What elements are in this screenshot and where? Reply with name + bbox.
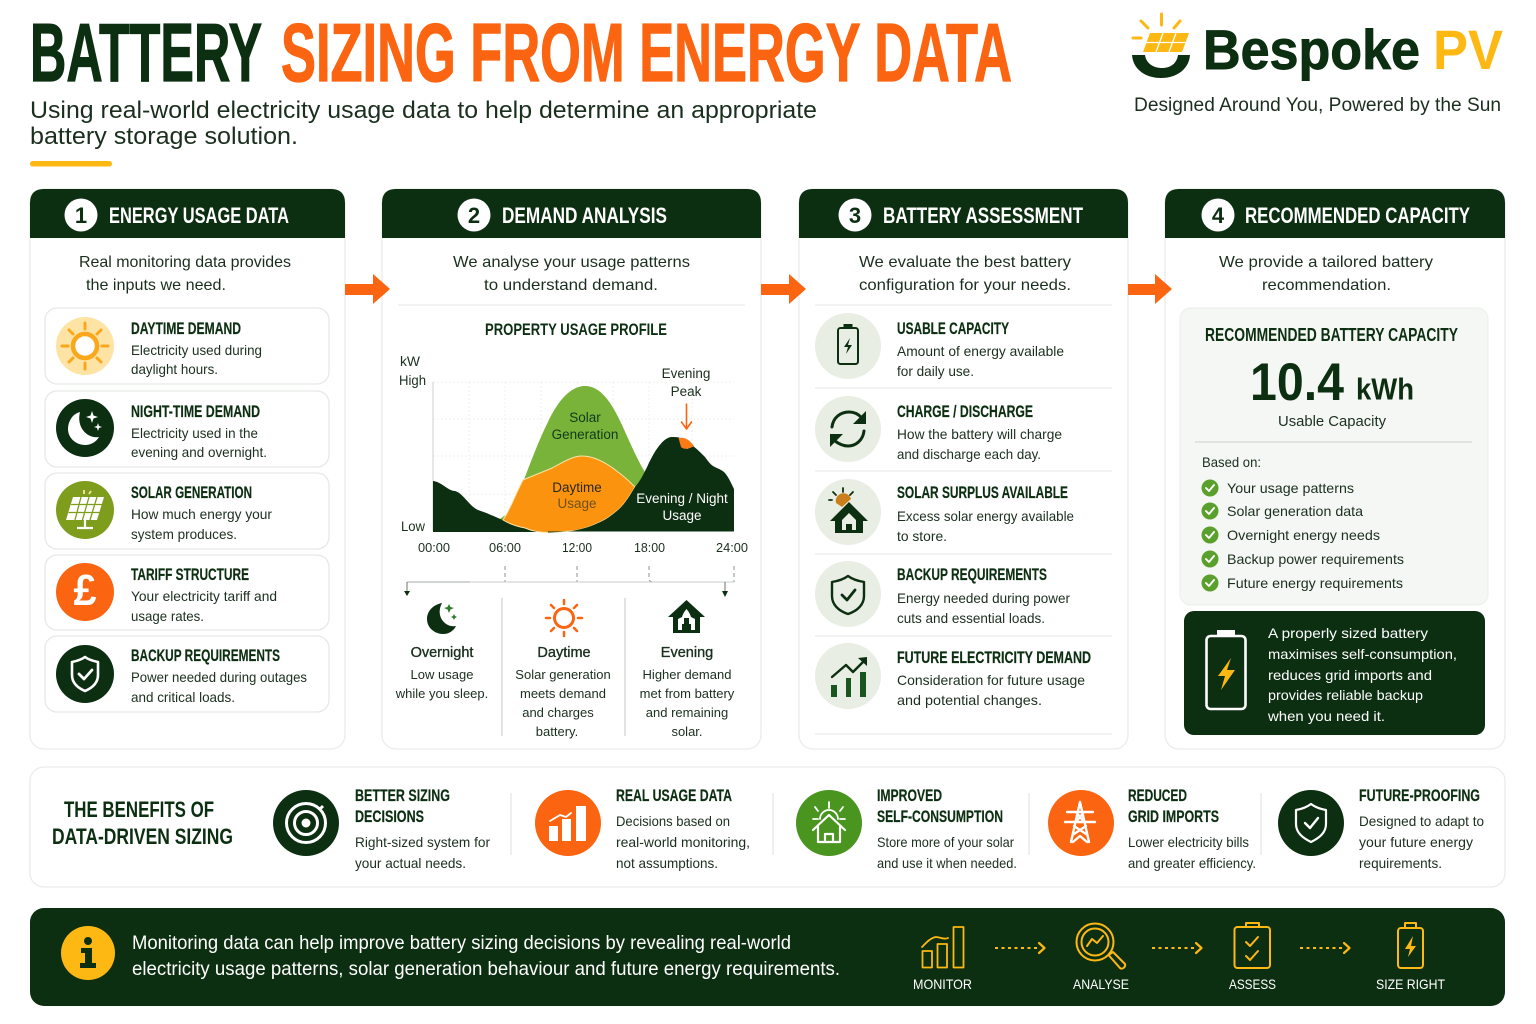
- benefit: reduced grid imports: and greater efficiency.: [1128, 855, 1256, 871]
- row: charge / discharge: How the battery will charge: [897, 426, 1062, 442]
- callout: properly sized battery: maximises self-consumption,: [1268, 646, 1457, 662]
- benefit: improved self-consumption: Store more of your solar: [877, 834, 1014, 850]
- column: daytime: battery.: [536, 724, 578, 739]
- row: charge / discharge: [815, 396, 1062, 462]
- row: future electricity demand: and potential changes.: [897, 692, 1042, 708]
- column: daytime: Solar generation: [515, 667, 611, 682]
- checklist: Future energy requirements: [1227, 575, 1403, 591]
- subtitle: Using real-world electricity usage data to help determine an appropriate: [30, 97, 817, 124]
- banner text: [132, 932, 840, 980]
- big number: 10.4 kWh: 10.4: [1250, 353, 1344, 412]
- chart text labels: Usage: [557, 496, 597, 511]
- chart text labels: 00:00: [418, 540, 450, 555]
- step: assess: ASSESS: [1229, 976, 1276, 992]
- chart text labels: Evening / Night: [636, 491, 728, 506]
- panel: benefits of data-driven sizing: [30, 767, 1505, 887]
- row: solar surplus available: [815, 479, 1074, 545]
- card: recommended battery capacity: RECOMMENDED BATTERY CAPACITY: [1205, 325, 1458, 345]
- panel 1 intro: the inputs we need.: [86, 277, 226, 294]
- benefits heading: [52, 797, 233, 849]
- column: daytime: and charges: [522, 705, 594, 720]
- chart text labels: 06:00: [489, 540, 521, 555]
- logo: Bespoke PV: PV: [1433, 18, 1503, 81]
- subtitle: [30, 97, 817, 150]
- icon: solar house: [796, 790, 862, 856]
- column: evening: Higher demand: [643, 667, 731, 682]
- panel 4 intro: We provide a tailored battery: [1219, 254, 1433, 271]
- banner: monitoring summary: [30, 908, 1505, 1006]
- logo: Bespoke PV: Designed Around You, Powered by the Sun: [1134, 95, 1501, 116]
- chart text labels: Generation: [552, 427, 618, 442]
- icon: target: [273, 790, 339, 856]
- step: monitor: [913, 927, 972, 992]
- benefit: improved self-consumption: IMPROVED: [877, 787, 942, 805]
- connector: time ranges: [404, 566, 734, 597]
- icon: moon: [427, 603, 456, 634]
- card: night-time demand: Electricity used in the: [131, 425, 258, 441]
- chart text labels: kW: [400, 354, 420, 369]
- chart text labels: Evening: [662, 366, 710, 381]
- row: solar surplus available: Excess solar energy available: [897, 508, 1074, 524]
- row: usable capacity: USABLE CAPACITY: [897, 320, 1009, 338]
- subtitle: battery storage solution.: [30, 123, 298, 150]
- icon: shield: [1278, 790, 1344, 856]
- icon: solar panel sun logo: [1132, 14, 1190, 78]
- row: backup requirements: Energy needed during power: [897, 590, 1070, 606]
- arrow: step 1 to 2: [345, 274, 390, 304]
- row: backup requirements: BACKUP REQUIREMENTS: [897, 566, 1047, 584]
- card: recommended battery capacity: [1180, 308, 1488, 605]
- chart text labels: [399, 354, 748, 555]
- column: daytime: [515, 600, 611, 739]
- row: usable capacity: [815, 313, 1064, 379]
- row: solar surplus available: SOLAR SURPLUS AVAILABLE: [897, 484, 1068, 502]
- step: assess: [1229, 923, 1276, 992]
- card: daytime demand: Electricity used during: [131, 342, 262, 358]
- column: daytime: Daytime: [537, 645, 591, 661]
- big number: 10.4 kWh: kWh: [1356, 372, 1414, 406]
- card: solar generation: [45, 473, 329, 549]
- step: analyse: ANALYSE: [1073, 976, 1129, 992]
- marker: evening peak: [678, 438, 694, 449]
- chart text labels: 18:00: [634, 540, 665, 555]
- panel 3 header: 3: [849, 203, 861, 228]
- row: charge / discharge: and discharge each day.: [897, 446, 1041, 462]
- callout: properly sized battery: reduces grid imports and: [1268, 667, 1432, 683]
- panel 3 header: [799, 189, 1128, 238]
- benefit: reduced grid imports: REDUCED: [1128, 787, 1187, 805]
- callout: properly sized battery: [1184, 611, 1485, 735]
- benefit: future-proofing: [1278, 787, 1484, 871]
- card: daytime demand: DAYTIME DEMAND: [131, 320, 241, 338]
- benefit: future-proofing: your future energy: [1359, 834, 1473, 850]
- arrow: analyse to assess: [1152, 943, 1202, 953]
- column: overnight: [395, 603, 488, 701]
- benefit: reduced grid imports: Lower electricity bills: [1128, 834, 1249, 850]
- panel 1 intro: Real monitoring data provides: [79, 254, 291, 271]
- panel 3 intro: configuration for your needs.: [859, 277, 1071, 294]
- card: backup requirements: BACKUP REQUIREMENTS: [131, 647, 280, 665]
- chart text labels: Peak: [671, 384, 702, 399]
- benefit: better sizing decisions: [273, 787, 490, 871]
- icon: battery with bolt: [1206, 630, 1246, 709]
- chart heading: PROPERTY USAGE PROFILE: [485, 320, 667, 339]
- panel 4 header: 4: [1212, 203, 1225, 228]
- column: evening: Evening: [661, 645, 713, 661]
- row: backup requirements: cuts and essential loads.: [897, 610, 1045, 626]
- column: daytime: meets demand: [520, 686, 606, 701]
- panel 2 header: DEMAND ANALYSIS: [502, 203, 667, 228]
- card: tariff structure: TARIFF STRUCTURE: [131, 566, 249, 584]
- benefit: improved self-consumption: [796, 787, 1017, 871]
- icon: pound: £: [74, 566, 97, 615]
- panel 2 header: 2: [468, 203, 480, 228]
- benefits heading: DATA-DRIVEN SIZING: [52, 824, 233, 849]
- panel 1 header: 1: [75, 203, 87, 228]
- card: solar generation: How much energy your: [131, 506, 272, 522]
- checklist: Your usage patterns: [1227, 480, 1354, 496]
- card: tariff structure: Your electricity tariff and: [131, 588, 277, 604]
- row: future electricity demand: Consideration for future usage: [897, 672, 1085, 688]
- checklist: Backup power requirements: [1227, 551, 1404, 567]
- card: daytime demand: [45, 308, 329, 384]
- logo: Bespoke PV: Bespoke: [1203, 18, 1420, 81]
- panel 3: battery assessment: [799, 189, 1128, 749]
- icon: shield: [815, 561, 881, 627]
- title: [30, 6, 1012, 99]
- card: night-time demand: [45, 391, 329, 467]
- chart text labels: Solar: [569, 410, 601, 425]
- row: solar surplus available: to store.: [897, 528, 947, 544]
- card: tariff structure: usage rates.: [131, 608, 204, 624]
- card: daytime demand: daylight hours.: [131, 361, 218, 377]
- icon: battery: [815, 313, 881, 379]
- benefit: real usage data: Decisions based on: [616, 813, 730, 829]
- card: backup requirements: [45, 636, 329, 712]
- panel 3 header: BATTERY ASSESSMENT: [883, 203, 1083, 228]
- icon: sync arrows: [815, 396, 881, 462]
- panel 2: demand analysis: [382, 189, 761, 749]
- icon: sun: [546, 600, 582, 636]
- row: usable capacity: Amount of energy available: [897, 343, 1064, 359]
- panel 2 intro: [453, 254, 690, 294]
- benefit: reduced grid imports: GRID IMPORTS: [1128, 808, 1219, 826]
- card: night-time demand: NIGHT-TIME DEMAND: [131, 403, 260, 421]
- panel 4 intro: recommendation.: [1262, 277, 1391, 294]
- panel 2 intro: to understand demand.: [484, 277, 658, 294]
- column: overnight: Overnight: [411, 645, 473, 661]
- column: evening: and remaining: [646, 705, 728, 720]
- icon: info: [61, 926, 115, 980]
- row: future electricity demand: [815, 643, 1091, 709]
- icon: growth chart: [815, 643, 881, 709]
- chart text labels: 12:00: [562, 540, 592, 555]
- callout: properly sized battery: A properly sized battery: [1268, 625, 1428, 641]
- banner text: Monitoring data can help improve battery sizing decisions by revealing real-world: [132, 932, 791, 954]
- panel 4 header: [1165, 189, 1505, 238]
- icon: house with sun: [815, 479, 881, 545]
- panel 3 intro: We evaluate the best battery: [859, 254, 1071, 271]
- card: backup requirements: Power needed during outages: [131, 669, 307, 685]
- icon: shield: [56, 645, 114, 703]
- row: backup requirements: [815, 561, 1070, 627]
- benefits heading: THE BENEFITS OF: [64, 797, 214, 822]
- banner text: electricity usage patterns, solar generation behaviour and future energy requirements.: [132, 958, 840, 980]
- row: future electricity demand: FUTURE ELECTRICITY DEMAND: [897, 649, 1091, 667]
- panel 1 header: ENERGY USAGE DATA: [109, 203, 289, 228]
- arrow: step 3 to 4: [1128, 274, 1172, 304]
- area: night usage left: [433, 481, 548, 532]
- column: evening: [640, 600, 735, 739]
- card: night-time demand: evening and overnight.: [131, 444, 267, 460]
- benefit: better sizing decisions: Right-sized system for: [355, 834, 490, 850]
- arrow: step 2 to 3: [761, 274, 806, 304]
- benefit: real usage data: real-world monitoring,: [616, 834, 750, 850]
- benefit: real usage data: REAL USAGE DATA: [616, 787, 732, 805]
- panel 3 intro: [859, 254, 1071, 294]
- area: evening usage: [548, 437, 734, 532]
- benefit: future-proofing: Designed to adapt to: [1359, 813, 1484, 829]
- benefit: reduced grid imports: [1048, 787, 1256, 871]
- icon: pound: [56, 563, 114, 621]
- panel 4 intro: [1219, 254, 1433, 294]
- area: solar generation: [488, 386, 645, 531]
- arrow: evening peak: [682, 404, 692, 429]
- panel 2 header: [382, 189, 761, 238]
- step: monitor: MONITOR: [913, 976, 972, 992]
- panel 2 intro: We analyse your usage patterns: [453, 254, 690, 271]
- area: daytime usage: [503, 456, 635, 532]
- card: tariff structure: [45, 555, 329, 630]
- icon: sun: [56, 317, 114, 375]
- panel 4: recommended capacity: [1165, 189, 1505, 749]
- card: backup requirements: and critical loads.: [131, 689, 235, 705]
- card: solar generation: SOLAR GENERATION: [131, 484, 252, 502]
- icon: solar panel: [56, 481, 114, 539]
- callout: properly sized battery: when you need it.: [1267, 708, 1385, 724]
- benefit: future-proofing: requirements.: [1359, 855, 1442, 871]
- step: size right: SIZE RIGHT: [1376, 976, 1445, 992]
- checklist: Solar generation data: [1227, 503, 1363, 519]
- icon: moon: [56, 399, 114, 457]
- column: overnight: Low usage: [411, 667, 473, 682]
- title: SIZING FROM ENERGY DATA: [281, 6, 1012, 99]
- checklist: [1202, 480, 1404, 592]
- chart text labels: Usage: [662, 508, 702, 523]
- checklist: Overnight energy needs: [1227, 527, 1380, 543]
- benefit: better sizing decisions: BETTER SIZING: [355, 787, 450, 805]
- benefit: improved self-consumption: SELF-CONSUMPTION: [877, 808, 1003, 826]
- panel 1 intro: [79, 254, 291, 294]
- callout: properly sized battery: provides reliable backup: [1268, 687, 1423, 703]
- chart: property usage profile: [399, 354, 748, 555]
- title: BATTERY: [30, 6, 262, 99]
- benefit: better sizing decisions: your actual needs.: [355, 855, 466, 871]
- column: evening: solar.: [671, 724, 703, 739]
- card: recommended battery capacity: Usable Capacity: [1278, 413, 1386, 430]
- benefit: improved self-consumption: and use it when needed.: [877, 855, 1017, 871]
- card: recommended battery capacity: Based on:: [1202, 454, 1261, 470]
- column: overnight: while you sleep.: [395, 686, 488, 701]
- logo: Bespoke PV: [1132, 14, 1503, 116]
- benefit: better sizing decisions: DECISIONS: [355, 808, 424, 826]
- icon: house: [668, 600, 705, 633]
- row: charge / discharge: CHARGE / DISCHARGE: [897, 403, 1033, 421]
- benefit: future-proofing: FUTURE-PROOFING: [1359, 787, 1480, 805]
- panel 1: energy usage data: [30, 189, 345, 749]
- chart text labels: 24:00: [716, 540, 748, 555]
- step: size right: [1376, 923, 1445, 992]
- big number: 10.4 kWh: [1250, 353, 1414, 412]
- icon: pylon: [1048, 790, 1114, 856]
- row: usable capacity: for daily use.: [897, 363, 974, 379]
- panel 4 header: RECOMMENDED CAPACITY: [1245, 203, 1470, 228]
- chart text labels: Daytime: [552, 480, 602, 495]
- chart text labels: Low: [401, 519, 425, 534]
- icon: bar chart: [535, 790, 601, 856]
- panel 1 header: [30, 189, 345, 238]
- arrow: assess to size right: [1300, 943, 1350, 953]
- column: evening: met from battery: [640, 686, 735, 701]
- chart text labels: High: [399, 373, 426, 388]
- card: solar generation: system produces.: [131, 526, 237, 542]
- arrow: monitor to analyse: [995, 943, 1044, 953]
- benefit: real usage data: not assumptions.: [616, 855, 718, 871]
- step: analyse: [1073, 924, 1129, 992]
- benefit: real usage data: [535, 787, 750, 871]
